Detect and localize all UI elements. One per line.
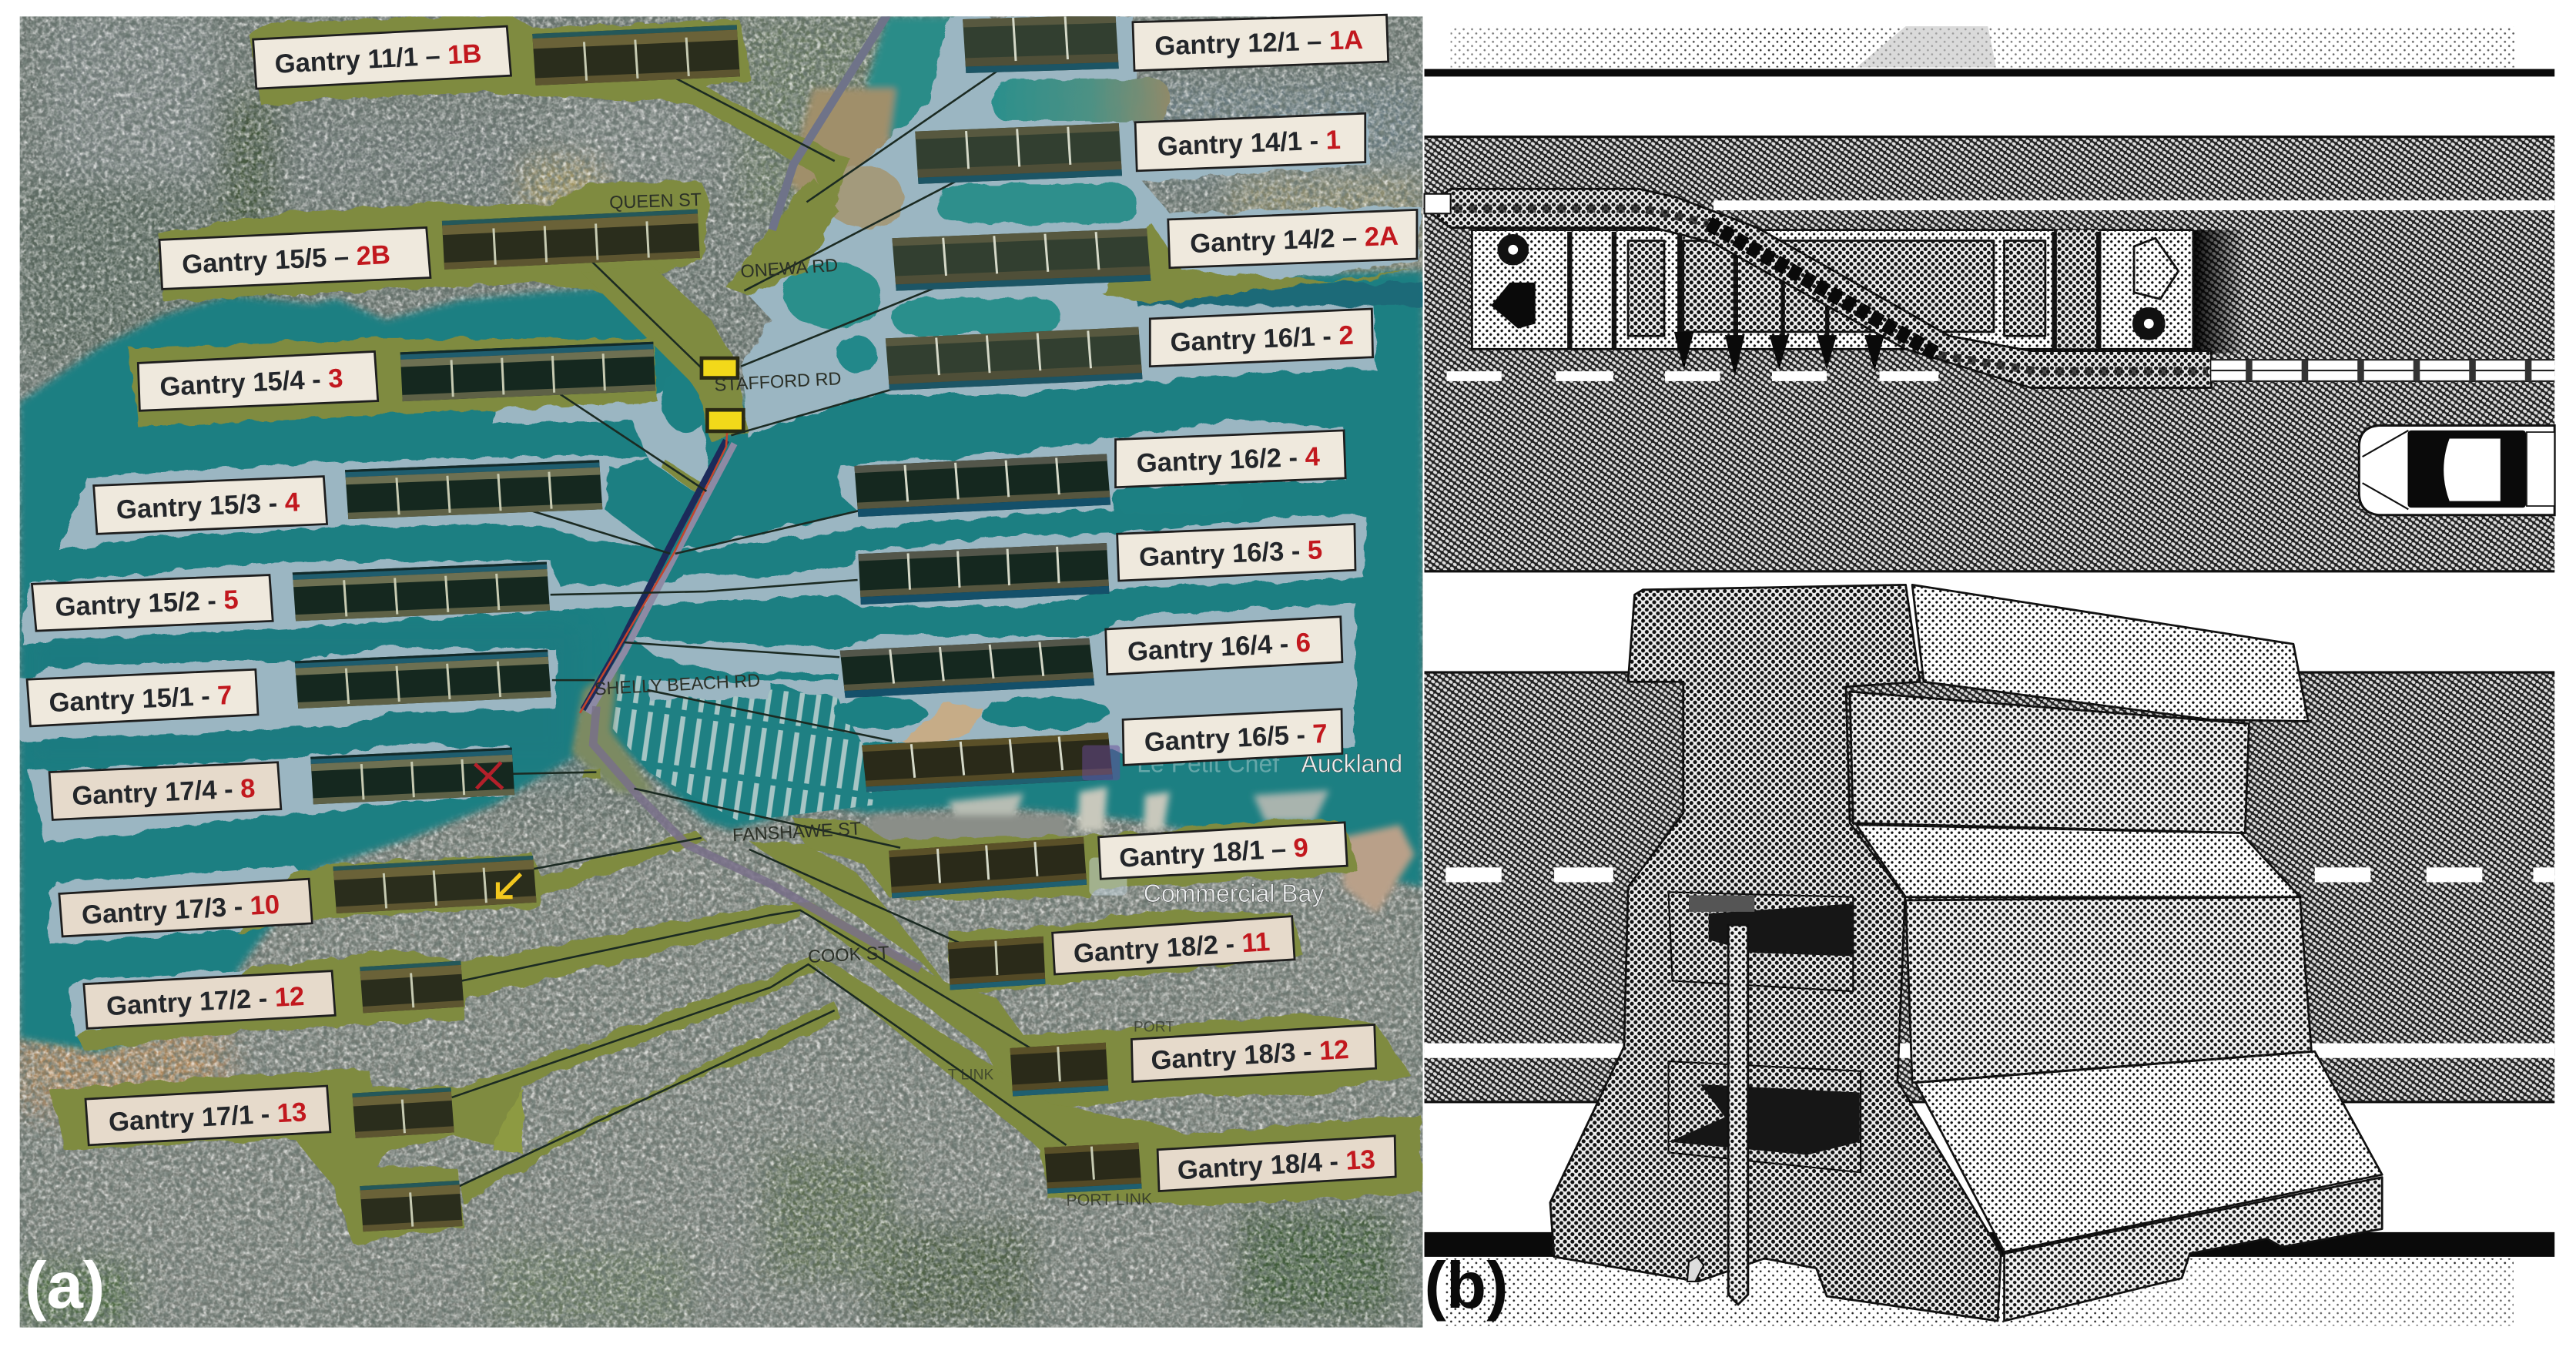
- gantry face 18/2: [948, 937, 1045, 990]
- barrier lower slope: [1915, 1051, 2382, 1252]
- label: Gantry 18/2 - 11: Gantry 18/2 - 11: [1073, 927, 1271, 969]
- gantry face 17/2: [360, 960, 464, 1013]
- map place labels and markers: Commercial Bay: [1144, 880, 1324, 907]
- barrier base: [2005, 1178, 2382, 1321]
- map place labels and markers: Auckland: [1301, 750, 1402, 778]
- motorway road: [593, 15, 920, 970]
- teal water blobs between the mask bands: [641, 79, 1422, 749]
- aerial land base: [20, 16, 1422, 1331]
- label: Gantry 17/3 - 10: Gantry 17/3 - 10: [81, 890, 280, 930]
- barrier upper wall: [1850, 692, 2249, 833]
- gantry sign faces: [293, 15, 1151, 1231]
- harbour bridge with red alignment line: [580, 421, 735, 713]
- label: Gantry 18/1 – 9: [1099, 823, 1347, 879]
- gantry face 14/2: [892, 229, 1151, 291]
- gantry face 15/2: [293, 562, 550, 621]
- panel: (a) aerial map of gantry locations: [20, 15, 1422, 1331]
- gantry face 18/1: [889, 837, 1087, 898]
- leader lines from gantry sign faces to the route: [452, 58, 1067, 1186]
- label: Gantry 14/1 - 1: Gantry 14/1 - 1: [1157, 126, 1342, 162]
- label: Gantry 17/1 - 13: Gantry 17/1 - 13: [108, 1097, 307, 1138]
- label: Gantry 18/4 - 13: [1157, 1136, 1395, 1191]
- harbour water: [20, 16, 1422, 1051]
- label: Gantry 17/2 - 12: Gantry 17/2 - 12: [106, 982, 305, 1021]
- barrier transfer conveyor: [1425, 189, 2211, 387]
- label: Gantry 14/2 – 2A: Gantry 14/2 – 2A: [1190, 222, 1399, 259]
- map road name labels: COOK ST: [808, 943, 889, 967]
- transfer vehicle shadow: [2193, 230, 2246, 354]
- panel: (b) moveable barrier transfer vehicle and barrier section: [1425, 26, 2554, 1325]
- gantry face 15/4: [400, 342, 655, 401]
- label: Gantry 18/3 - 12: [1131, 1024, 1376, 1081]
- label: Gantry 15/1 - 7: [27, 669, 258, 726]
- map place labels and markers: Le Petit Chef: [1137, 750, 1279, 778]
- label: Gantry 17/2 - 12: [84, 971, 335, 1028]
- gantry face 15/1: [295, 649, 551, 709]
- small notch bolt: [1687, 1257, 1703, 1282]
- gantry name labels: [27, 15, 1417, 1191]
- map road name labels: ONEWA RD: [740, 255, 839, 281]
- label: Gantry 15/3 - 4: [94, 477, 327, 534]
- label: Gantry 15/2 - 5: [32, 575, 273, 631]
- gantry face 15/5: [442, 209, 700, 270]
- panel label (b): (b): [1425, 1249, 1508, 1322]
- label: Gantry 18/2 - 11: [1053, 916, 1295, 974]
- barrier upper slope: [1857, 825, 2300, 897]
- upper road plan view: [1425, 136, 2554, 572]
- barrier chain laid on road: [2211, 360, 2554, 381]
- cab marker, left: [1491, 283, 1536, 329]
- label: Gantry 14/2 – 2A: [1168, 209, 1417, 268]
- label: Gantry 18/1 – 9: Gantry 18/1 – 9: [1118, 833, 1309, 873]
- transfer vehicle plan view: [1472, 230, 2193, 349]
- wheel, rear left: [1497, 234, 1529, 266]
- label: Gantry 16/2 - 4: [1116, 431, 1345, 488]
- road edge line, top: [1425, 69, 2554, 76]
- gantry face 17/4: [310, 748, 514, 804]
- label: Gantry 16/5 - 7: [1123, 709, 1342, 765]
- gantry face 16/3: [858, 543, 1109, 605]
- map road name labels: FANSHAWE ST: [732, 818, 862, 845]
- label: Gantry 15/5 – 2B: Gantry 15/5 – 2B: [181, 240, 391, 280]
- label: Gantry 16/4 - 6: Gantry 16/4 - 6: [1127, 628, 1311, 667]
- map road name labels: PORT: [1134, 1020, 1174, 1036]
- label: Gantry 18/4 - 13: Gantry 18/4 - 13: [1177, 1145, 1376, 1185]
- bottom road edge: [1425, 1232, 2554, 1257]
- label: Gantry 16/5 - 7: Gantry 16/5 - 7: [1144, 719, 1328, 757]
- label: Gantry 15/1 - 7: Gantry 15/1 - 7: [49, 681, 233, 718]
- arrows: barrier transfer direction: [1674, 332, 1884, 376]
- halftone strip at top: [1451, 26, 2515, 67]
- lower connector cut-out: [1669, 1061, 1861, 1172]
- label: Gantry 12/1 – 1A: Gantry 12/1 – 1A: [1154, 25, 1364, 61]
- direction arrow outline, right: [2134, 238, 2179, 299]
- label: Gantry 17/4 - 8: [49, 762, 281, 819]
- label: Gantry 16/1 - 2: [1150, 309, 1373, 367]
- barrier top cap side: [1912, 585, 2308, 721]
- map place labels and markers: [1082, 746, 1402, 907]
- label: Gantry 15/3 - 4: Gantry 15/3 - 4: [116, 488, 301, 525]
- label: Gantry 16/3 - 5: [1117, 524, 1355, 581]
- gantry face 12/1: [963, 15, 1119, 73]
- label: Gantry 16/4 - 6: [1106, 617, 1342, 675]
- icon: red cross on gantry 17/4: [475, 762, 503, 789]
- olive mask bands over land: [51, 15, 1422, 1244]
- map road name labels: STAFFORD RD: [714, 368, 842, 395]
- gantry face 14/1: [915, 123, 1122, 184]
- icon: yellow arrow on gantry 17/3: [497, 874, 521, 897]
- concrete barrier section: [1550, 585, 2382, 1321]
- barrier end face: [1550, 585, 2001, 1321]
- label: Gantry 14/1 - 1: [1135, 113, 1365, 171]
- map road name labels: PORT LINK: [1066, 1190, 1152, 1210]
- map road name labels: T LINK: [948, 1067, 993, 1084]
- gantry face 18/4: [1044, 1143, 1142, 1194]
- pale blue mask bands over water: [20, 16, 1419, 1038]
- yellow section markers: [702, 358, 743, 431]
- lower road perspective: [1425, 671, 2554, 1103]
- gantry face 11/1: [532, 25, 740, 85]
- gantry face 16/4: [840, 638, 1094, 698]
- panel label (a): (a): [25, 1249, 105, 1322]
- connecting steel pin: [1728, 925, 1748, 1305]
- wheel, front right: [2132, 307, 2166, 340]
- halftone strip at bottom: [1445, 1258, 2514, 1325]
- label: Gantry 16/3 - 5: Gantry 16/3 - 5: [1138, 535, 1323, 572]
- map road name labels: QUEEN ST: [609, 189, 702, 213]
- label: Gantry 18/3 - 12: Gantry 18/3 - 12: [1151, 1035, 1350, 1076]
- gantry face 16/2: [854, 454, 1110, 517]
- gantry face 18/3: [1010, 1043, 1108, 1096]
- barrier middle wall: [1906, 897, 2311, 1083]
- map road name labels: SHELLY BEACH RD: [594, 670, 761, 699]
- label: Gantry 17/3 - 10: [59, 879, 312, 937]
- gantry face 16/5: [862, 732, 1113, 792]
- label: Gantry 15/4 - 3: [138, 352, 378, 410]
- label: Gantry 11/1 – 1B: Gantry 11/1 – 1B: [274, 39, 482, 79]
- label: Gantry 15/5 – 2B: [159, 227, 430, 289]
- upper connector cut-out: [1669, 892, 1853, 991]
- map road name labels: [594, 189, 1174, 1210]
- label: Gantry 16/2 - 4: Gantry 16/2 - 4: [1136, 442, 1321, 478]
- gantry face 17/3: [333, 856, 537, 913]
- label: Gantry 11/1 – 1B: [253, 26, 511, 89]
- gantry face 17/1 upper: [352, 1087, 454, 1138]
- car plan view: [2359, 425, 2554, 515]
- label: Gantry 15/4 - 3: Gantry 15/4 - 3: [159, 364, 343, 402]
- gantry face 17/1 lower: [360, 1181, 463, 1231]
- label: Gantry 17/1 - 13: [85, 1086, 330, 1145]
- label: Gantry 16/1 - 2: Gantry 16/1 - 2: [1170, 321, 1354, 357]
- label: Gantry 17/4 - 8: Gantry 17/4 - 8: [72, 774, 256, 811]
- gantry face 16/1: [886, 327, 1142, 390]
- marina and Shelly Beach shore: [571, 665, 874, 822]
- label: Gantry 12/1 – 1A: [1133, 15, 1388, 71]
- gantry face 15/3: [345, 460, 602, 519]
- harbour piers: [871, 787, 1415, 913]
- label: Gantry 15/2 - 5: Gantry 15/2 - 5: [55, 585, 239, 622]
